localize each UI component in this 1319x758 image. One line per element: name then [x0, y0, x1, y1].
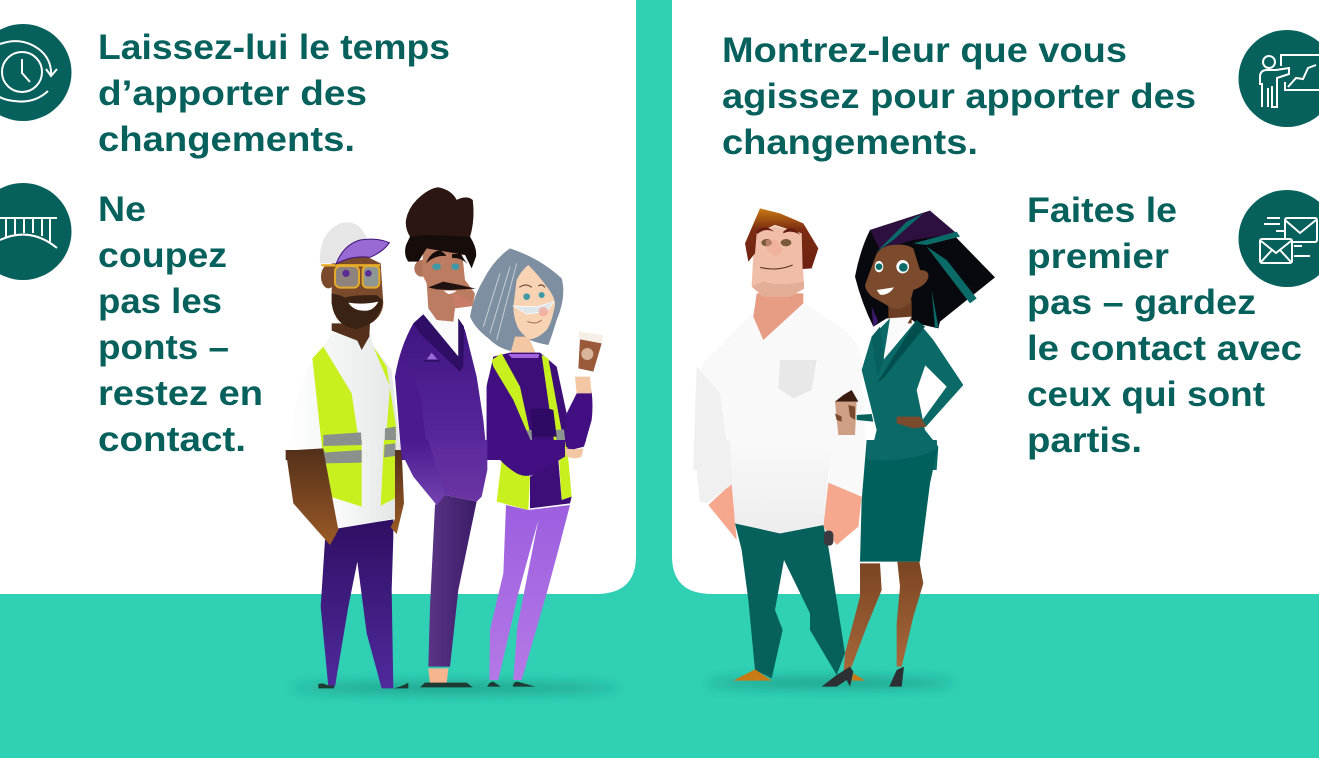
heading: show you are acting	[722, 31, 1196, 162]
text block: take the first step: ceux qui sont	[1027, 375, 1265, 414]
text block: take the first step: le contact avec	[1027, 329, 1302, 368]
heading: let them have time: d’apporter des	[98, 74, 367, 113]
illustration: man in purple suit with moustache	[395, 187, 487, 687]
text block: do not burn bridges: restez en	[98, 374, 263, 413]
icon: bridge	[0, 183, 72, 280]
illustration: man in white shirt holding coffee	[693, 208, 867, 681]
text block: do not burn bridges: coupez	[98, 236, 227, 275]
icon: presenter with chart	[1238, 30, 1319, 127]
panel: left white card	[0, 0, 636, 594]
panel: right white card	[672, 0, 1319, 594]
icon: clock with circular arrow	[0, 24, 72, 121]
icon: envelopes	[1238, 190, 1319, 287]
text block: do not burn bridges: pas les	[98, 282, 222, 321]
ground shadow: left group	[290, 683, 620, 693]
text block: take the first step: Faites le	[1027, 191, 1177, 230]
text block: do not burn bridges: Ne	[98, 190, 146, 229]
text block: take the first step: premier	[1027, 237, 1169, 276]
heading: let them have time	[98, 28, 450, 159]
text block: do not burn bridges	[98, 190, 263, 459]
text block: take the first step	[1027, 191, 1302, 460]
heading: show you are acting: Montrez-leur que vous	[722, 31, 1127, 70]
text block: do not burn bridges: ponts –	[98, 328, 229, 367]
heading: show you are acting: changements.	[722, 123, 978, 162]
illustration: woman with grey hair and coffee	[470, 248, 603, 687]
heading: show you are acting: agissez pour apporter des	[722, 77, 1196, 116]
ground shadow: right group	[705, 678, 955, 688]
text block: take the first step: pas – gardez	[1027, 283, 1256, 322]
illustration: woman in teal suit	[822, 211, 995, 687]
heading: let them have time: Laissez-lui le temps	[98, 28, 450, 67]
illustration: construction worker with yellow vest	[286, 222, 408, 688]
text block: do not burn bridges: contact.	[98, 420, 246, 459]
text block: take the first step: partis.	[1027, 421, 1142, 460]
heading: let them have time: changements.	[98, 120, 355, 159]
